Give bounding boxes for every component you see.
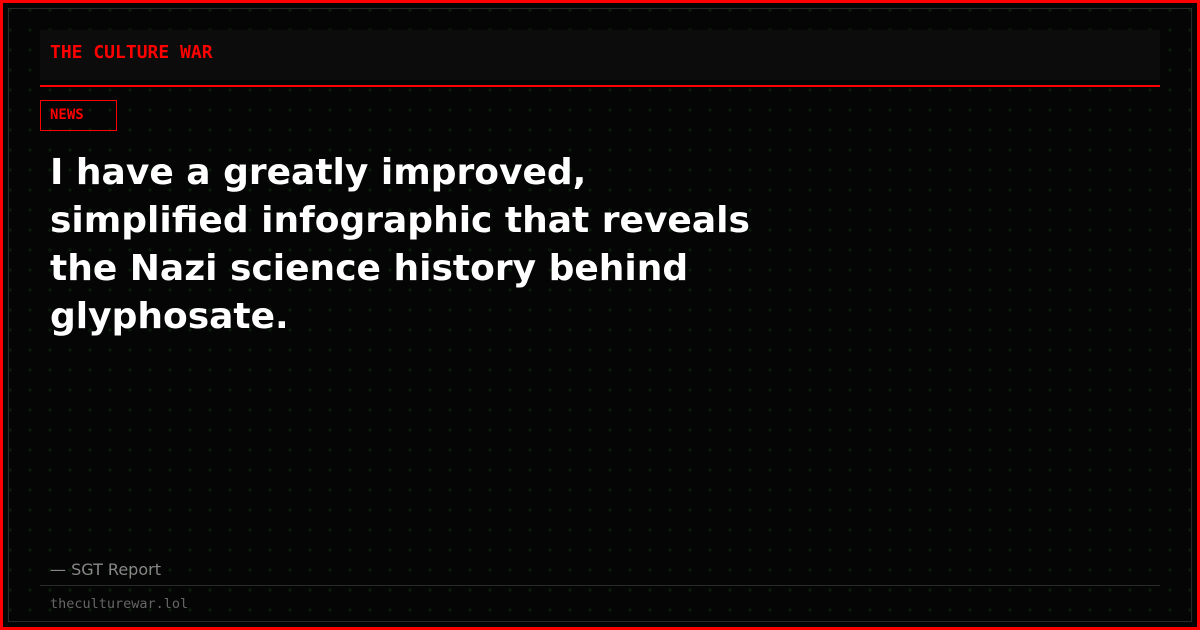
tag: news: NEWS [50, 107, 84, 123]
title: glyphosate. [50, 296, 289, 337]
url: theculturewar.lol [50, 596, 188, 612]
brand heading: THE CULTURE WAR [50, 42, 213, 63]
header band [40, 30, 1160, 80]
byline: — SGT Report [50, 560, 161, 579]
title [50, 152, 750, 337]
title: simplified infographic that reveals [50, 200, 750, 241]
title: I have a greatly improved, [50, 152, 586, 193]
tag: news [40, 100, 117, 131]
title: the Nazi science history behind [50, 248, 688, 289]
